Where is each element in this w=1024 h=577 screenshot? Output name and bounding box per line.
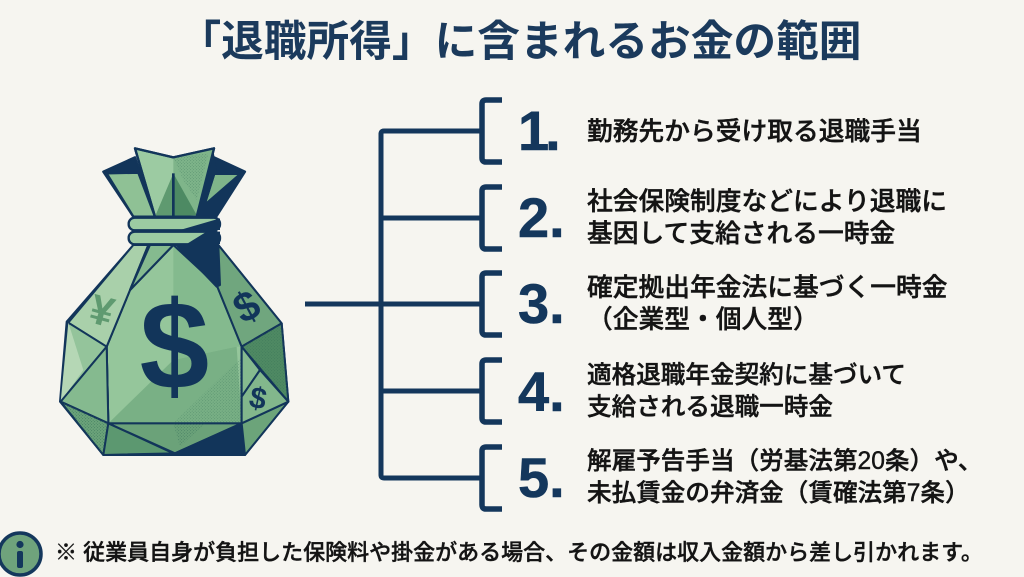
number 3: 3. — [518, 272, 565, 335]
bag ties — [129, 218, 220, 244]
item 2 text: 社会保険制度などにより退職に — [587, 188, 947, 216]
footnote: ※ 従業員自身が負担した保険料や掛金がある場合、その金額は収入金額から差し引かれます。 — [55, 540, 983, 565]
icon: info — [0, 533, 41, 575]
brackets — [482, 100, 502, 509]
item 2 text — [587, 188, 947, 248]
small dollar symbol upper right: $ — [225, 280, 268, 332]
small dollar symbol lower right: $ — [246, 381, 270, 417]
item 5 text: 未払賃金の弁済金（賃確法第7条） — [587, 480, 970, 507]
bag top flaps — [103, 148, 245, 217]
number 4: 4. — [518, 360, 565, 423]
number 2: 2. — [518, 186, 565, 249]
item 1 text: 勤務先から受け取る退職手当 — [587, 118, 922, 146]
item 4 text: 適格退職年金契約に基づいて — [587, 362, 906, 389]
number 5: 5. — [518, 446, 565, 509]
icon: money bag — [60, 148, 288, 455]
item 2 text: 基因して支給される一時金 — [587, 220, 895, 248]
number 1: 1. — [518, 99, 557, 162]
item 4 text — [587, 362, 906, 421]
item 3 text — [587, 274, 948, 334]
item 5 text — [587, 448, 983, 507]
item 3 text: （企業型・個人型） — [587, 306, 819, 334]
title: 「退職所得」に含まれるお金の範囲 — [178, 18, 862, 66]
large dollar symbol: $ — [140, 276, 209, 415]
bag body — [60, 245, 288, 455]
yen symbol: ¥ — [85, 285, 119, 336]
item 5 text: 解雇予告手当（労基法第20条）や、 — [587, 448, 983, 475]
item 3 text: 確定拠出年金法に基づく一時金 — [587, 274, 948, 302]
connector tree — [305, 131, 484, 478]
item 4 text: 支給される退職一時金 — [587, 394, 833, 421]
